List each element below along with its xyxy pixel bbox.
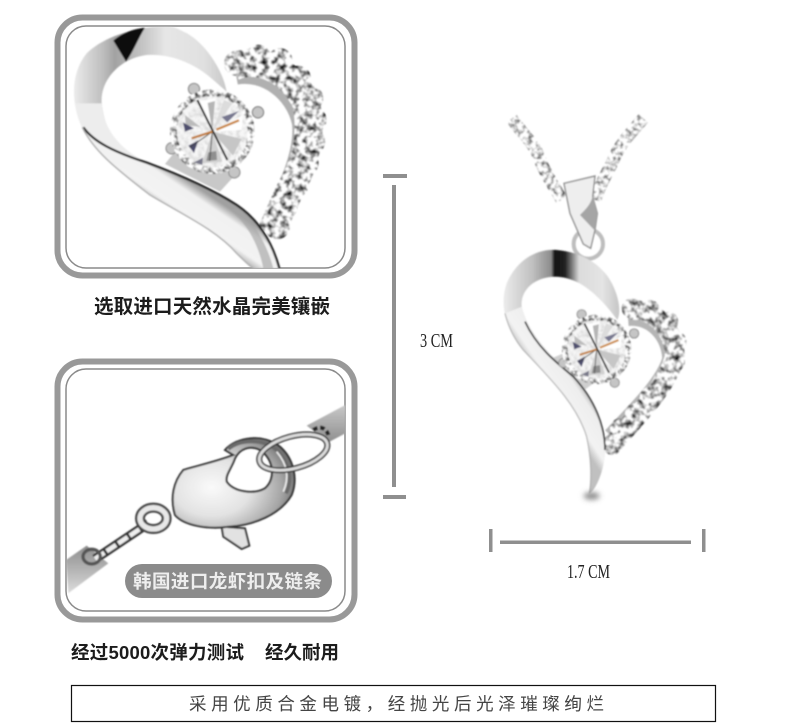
footer note box: 采用优质合金电镀，经抛光后光泽璀璨绚烂 <box>189 694 604 714</box>
lobster claw body <box>173 438 295 528</box>
lower band <box>505 307 605 493</box>
heart band <box>504 250 619 493</box>
chain <box>512 118 643 200</box>
claw spur <box>222 527 249 549</box>
caption: elasticity test <box>71 642 339 663</box>
caption: elasticity test: 经久耐用 <box>265 642 339 663</box>
center diamond <box>559 310 639 387</box>
chain band left <box>66 546 108 593</box>
center setting <box>165 152 237 192</box>
caption: crystal setting: 选取进口天然水晶完美镶嵌 <box>94 295 330 318</box>
panel frame <box>58 362 354 620</box>
label: imported clasp and chain: 韩国进口龙虾扣及链条 <box>133 571 322 592</box>
lower band dark reflection <box>240 218 274 268</box>
drop shadow <box>584 492 600 500</box>
height dimension line <box>383 174 407 499</box>
height label: 3 CM <box>420 330 453 352</box>
link rings <box>83 508 167 564</box>
chain band right <box>307 405 345 442</box>
caption: elasticity test: 经过5000次弹力测试 <box>71 642 244 663</box>
band crisp edge <box>83 127 279 268</box>
width dimension line <box>489 529 706 552</box>
panel: lobster clasp close-up <box>58 362 354 620</box>
pave stones arc <box>224 45 327 239</box>
lower band <box>82 127 280 268</box>
panel frame <box>58 18 354 276</box>
band dark reflection <box>113 28 145 62</box>
inner left band shading <box>75 103 143 161</box>
label: imported clasp and chain <box>125 564 332 598</box>
jump ring <box>574 229 603 259</box>
center diamond <box>166 83 264 178</box>
bale <box>564 176 597 248</box>
pendant pave stones <box>603 298 687 455</box>
setting <box>552 353 593 393</box>
band crisp edge <box>525 322 605 450</box>
width label: 1.7 CM <box>567 562 610 583</box>
pendant with chain <box>504 118 687 500</box>
illustration: heart pendant close-up <box>74 26 327 268</box>
footer note box <box>72 686 716 722</box>
claw gate ridge <box>228 441 289 493</box>
illustration: clasp and chain <box>66 405 345 593</box>
heart band <box>74 26 280 268</box>
panel: heart close-up <box>58 18 354 276</box>
end ring <box>255 428 331 477</box>
